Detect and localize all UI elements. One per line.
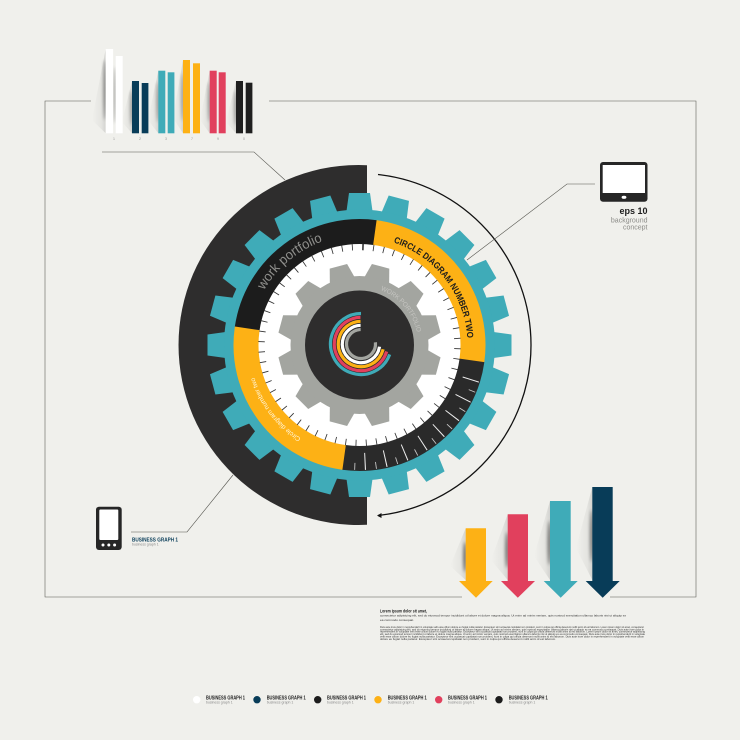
connector: bars to circle bbox=[102, 152, 285, 180]
legend: business graph 1 bbox=[388, 701, 414, 705]
gray gear bbox=[277, 263, 442, 427]
teal gear bbox=[208, 193, 512, 497]
lorem text block bbox=[380, 609, 645, 641]
tablet caption: concept bbox=[623, 224, 648, 232]
arrow chart bbox=[450, 487, 620, 598]
lorem text block: velit esse cillum dolore eu fugiat nulla pariatur. Excepteur sint occaecat cupidatat non proident, sunt in culpa qui officia deserunt mollit anim id est laborum. Duis aute irure dolor in reprehenderit in voluptate velit esse cillum bbox=[380, 634, 644, 638]
ring label: circle diagram number two: CIRCLE DIAGRAM NUMBER TWO bbox=[394, 237, 474, 338]
legend: business graph 1 bbox=[448, 701, 475, 705]
white disc bbox=[258, 244, 461, 446]
segmented ring bbox=[230, 216, 489, 474]
lorem text block: consectetur adipisicing elit, sed do eiusmod tempor incididunt ut labore et dolore magna aliqua. Ut enim ad minim veniam, quis nostrud exercitation ullamco laboris nisi ut aliquip ex bbox=[380, 614, 627, 618]
lorem text block: Duis aute irure dolor in reprehenderit in voluptate velit esse cillum dolore eu fugiat nulla pariatur. Excepteur sint occaecat cupidatat non proident, sunt in culpa qui officia deserunt mollit anim id est laborum. Lorem ipsum dolor sit amet, consectetur bbox=[380, 625, 644, 629]
legend: business graph 1 bbox=[267, 701, 293, 705]
tablet caption bbox=[611, 206, 648, 232]
connector: tablet to circle bbox=[467, 184, 595, 260]
ring label: work portfolio: work portfolio bbox=[258, 236, 322, 289]
top bar chart bbox=[92, 49, 252, 141]
phone caption: BUSINESS GRAPH 1 bbox=[132, 538, 178, 544]
phone caption: business graph 1 bbox=[132, 542, 159, 546]
black tick ring bbox=[258, 244, 461, 446]
connector: phone to circle bbox=[131, 475, 233, 532]
legend: business graph 1 bbox=[327, 701, 354, 705]
lorem text block: dolore eu fugiat nulla pariatur. Excepteur sint occaecat cupidatat non proident, sunt in culpa qui officia deserunt mollit anim id est laborum. bbox=[380, 637, 556, 641]
icon: tablet bbox=[600, 162, 648, 202]
legend: BUSINESS GRAPH 1 bbox=[448, 696, 487, 702]
legend: BUSINESS GRAPH 1 bbox=[206, 696, 245, 702]
top bar chart: 0 bbox=[243, 137, 245, 141]
icon: phone bbox=[96, 507, 122, 550]
lorem text block: elit, sed do eiusmod tempor incididunt ut labore et dolore magna aliqua. Ut enim ad minim veniam, quis nostrud exercitation ullamco laboris nisi ut aliquip ex ea commodo consequat. Duis aute irure dolor in reprehenderit in voluptate bbox=[380, 632, 645, 636]
legend: business graph 1 bbox=[509, 701, 535, 705]
lorem text block: consectetur adipisicing elit, sed do eiusmod tempor incididunt ut labore et dolore magna aliqua. Ut enim ad minim veniam, quis nostrud exercitation ullamco laboris nisi ut aliquip ex ea commodo consequat. Duis aute irure dolor in bbox=[380, 627, 644, 631]
top bar chart: 2 bbox=[139, 137, 141, 141]
top bar chart: 7 bbox=[191, 137, 193, 141]
lorem text block: Lorem ipsum dolor sit amet, bbox=[380, 609, 427, 614]
ring label: circle diagram lower: Circle diagram number two bbox=[252, 378, 300, 441]
top bar chart: 3 bbox=[165, 137, 167, 141]
phone caption bbox=[132, 538, 178, 546]
gear label: work portfolio: WORK PORTFOLIO bbox=[382, 286, 421, 332]
dark half circle bbox=[179, 165, 367, 525]
legend: BUSINESS GRAPH 1 bbox=[267, 696, 306, 702]
lorem text block: reprehenderit in voluptate velit esse cillum dolore eu fugiat nulla pariatur. Excepteur sint occaecat cupidatat non proident, sunt in culpa qui officia deserunt mollit anim id est laborum. Lorem ipsum dolor sit amet, consectetur adipisicing bbox=[380, 630, 645, 634]
legend bbox=[193, 696, 548, 705]
tablet caption: background bbox=[611, 218, 648, 224]
tablet caption: eps 10 bbox=[619, 206, 648, 216]
legend: BUSINESS GRAPH 1 bbox=[388, 696, 427, 702]
frame lines bbox=[45, 101, 696, 597]
center dark disc bbox=[305, 290, 414, 400]
top bar chart: 9 bbox=[217, 137, 219, 141]
legend: BUSINESS GRAPH 1 bbox=[327, 696, 366, 702]
legend: BUSINESS GRAPH 1 bbox=[509, 696, 548, 702]
white short ticks bbox=[201, 187, 518, 503]
concentric rainbow arcs bbox=[322, 305, 400, 383]
lorem text block: ea commodo consequat. bbox=[380, 618, 414, 622]
white long ticks bbox=[214, 200, 505, 490]
legend: business graph 1 bbox=[206, 701, 233, 705]
outer arrow arc bbox=[377, 174, 531, 518]
top bar chart: 1 bbox=[113, 137, 115, 141]
